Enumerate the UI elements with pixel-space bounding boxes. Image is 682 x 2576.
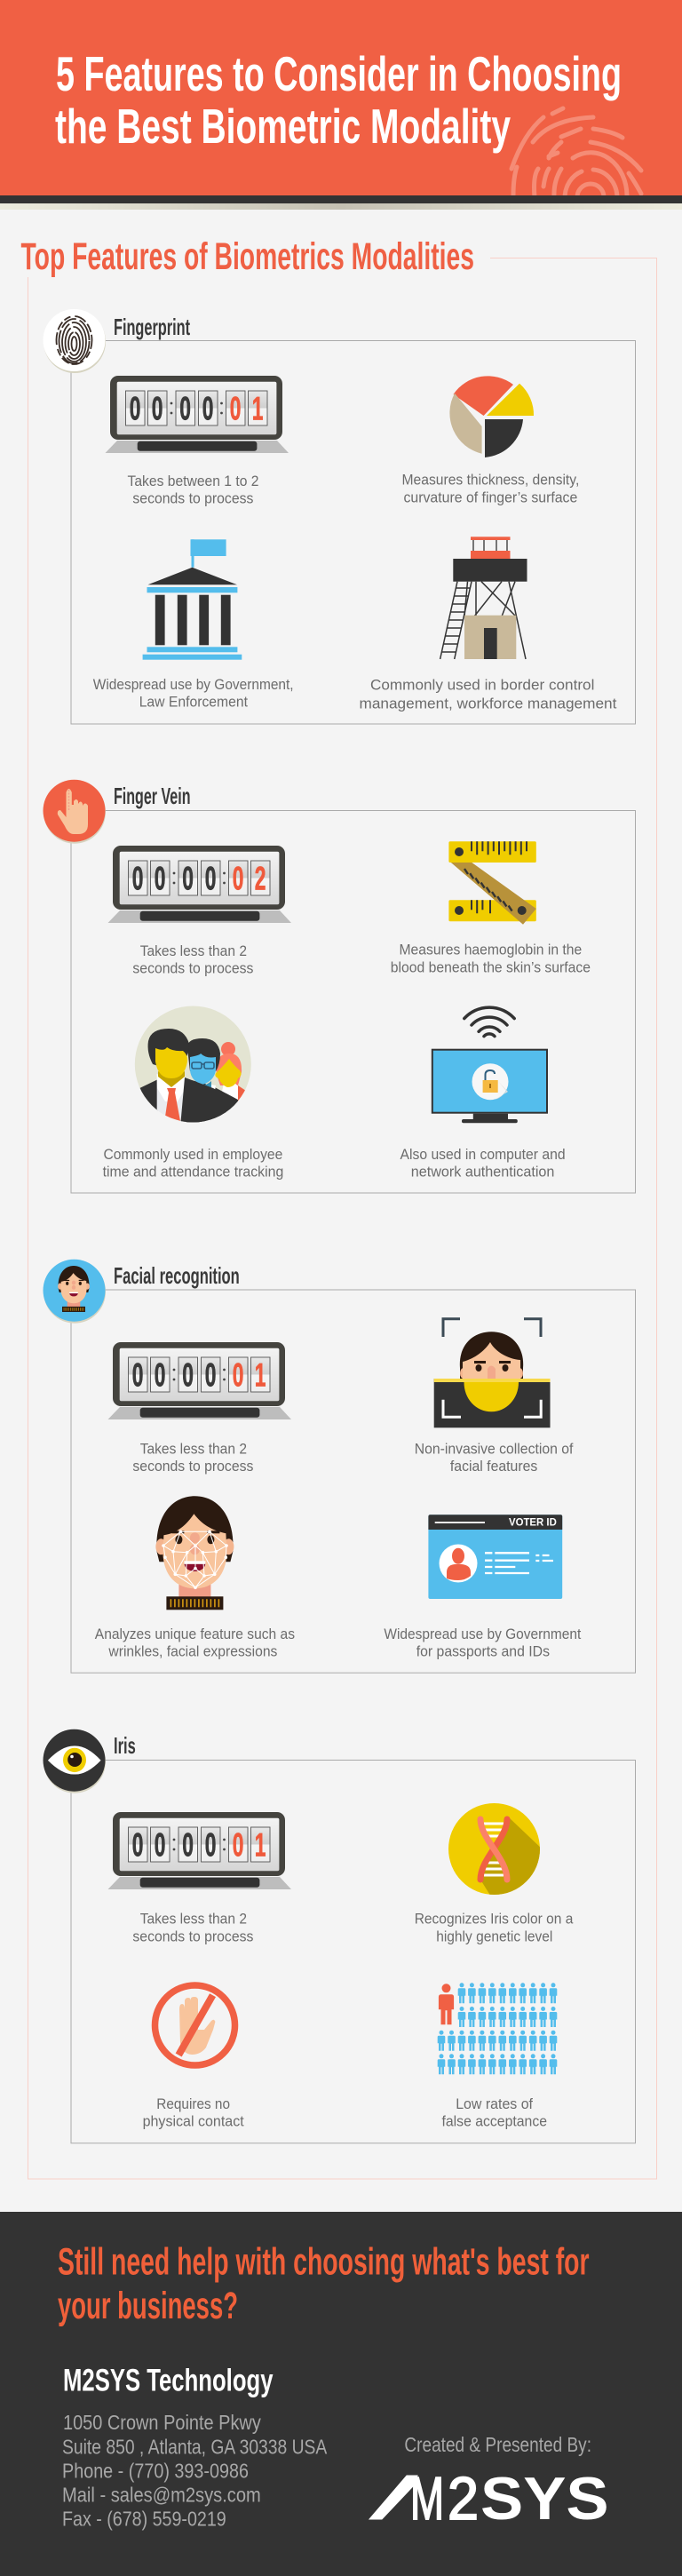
caption — [400, 1146, 566, 1181]
panel: finger vein — [43, 780, 636, 1193]
caption — [132, 1911, 253, 1944]
caption — [128, 473, 259, 507]
call to action: your business? — [58, 2285, 238, 2327]
caption — [95, 1626, 295, 1660]
caption: Low rates of — [456, 2095, 533, 2112]
icon: timer 00:00:01: 0 — [202, 391, 213, 427]
icon: no contact — [155, 1985, 234, 2065]
caption: Law Enforcement — [139, 694, 248, 711]
icon: fingerprint badge — [43, 309, 106, 373]
icon: timer 00:00:02: 2 — [255, 861, 266, 897]
icon: timer 00:00:01 — [105, 376, 289, 453]
fingerprint watermark — [512, 108, 641, 197]
caption: Analyzes unique feature such as — [95, 1626, 295, 1642]
address block: 1050 Crown Pointe Pkwy — [63, 2411, 261, 2434]
caption: network authentication — [411, 1164, 554, 1181]
caption: Takes less than 2 — [140, 1911, 247, 1928]
address block: Mail - sales@m2sys.com — [62, 2484, 261, 2507]
icon: timer 00:00:01: 0 — [155, 1357, 165, 1394]
panel: iris — [43, 1729, 636, 2143]
caption: Non-invasive collection of — [415, 1441, 574, 1458]
icon: timer 00:00:01: 0 — [179, 391, 191, 427]
panel frame — [71, 1761, 636, 2143]
icon: timer 00:00:01 — [108, 1342, 291, 1419]
title — [55, 46, 622, 154]
caption: Widespread use by Government, — [93, 676, 294, 693]
icon: timer 00:00:02: 0 — [155, 861, 165, 897]
icon: timer 00:00:01: 0 — [182, 1357, 194, 1394]
icon: timer 00:00:01: 0 — [155, 1827, 165, 1864]
icon: timer 00:00:02 — [108, 846, 291, 923]
heading: facial recognition: Facial recognition — [114, 1262, 240, 1289]
caption — [93, 676, 294, 711]
caption — [103, 1146, 283, 1181]
caption — [391, 942, 591, 975]
address block: Phone - (770) 393-0986 — [62, 2459, 249, 2482]
icon: pie chart — [449, 376, 534, 457]
footer panel — [0, 2212, 682, 2576]
caption — [359, 677, 617, 712]
caption: wrinkles, facial expressions — [107, 1643, 277, 1660]
caption — [415, 1911, 574, 1944]
woman — [221, 1042, 235, 1054]
outer frame — [28, 258, 657, 2179]
panel frame — [71, 341, 636, 724]
caption — [415, 1441, 574, 1475]
icon: timer 00:00:01: 1 — [255, 1827, 266, 1864]
icon: eye badge — [43, 1729, 106, 1793]
logo: SYS — [480, 2465, 609, 2532]
logo — [369, 2465, 609, 2532]
icon: timer 00:00:01: 0 — [132, 1357, 144, 1394]
icon: voter id card: VOTER ID — [509, 1515, 557, 1528]
logo: 2 — [448, 2465, 479, 2532]
caption: Takes less than 2 — [140, 942, 247, 959]
caption: Recognizes Iris color on a — [415, 1911, 574, 1928]
icon: face badge — [43, 1260, 106, 1324]
icon: face mesh — [155, 1496, 234, 1610]
icon: timer 00:00:01 — [108, 1812, 291, 1889]
icon: dna — [448, 1803, 543, 1901]
icon: timer 00:00:01: 0 — [182, 1827, 194, 1864]
icon: false acceptance people grid — [438, 1983, 557, 2074]
caption: false acceptance — [442, 2113, 547, 2130]
caption: management, workforce management — [359, 695, 617, 712]
icon: wifi computer — [432, 1007, 547, 1123]
icon: timer 00:00:01: 0 — [205, 1357, 217, 1394]
icon: watch tower — [440, 537, 527, 659]
main man — [140, 1080, 158, 1110]
caption — [132, 942, 253, 977]
caption: Measures thickness, density, — [401, 472, 579, 489]
caption — [143, 2095, 244, 2130]
caption: physical contact — [143, 2113, 244, 2130]
caption: Commonly used in border control — [370, 677, 594, 694]
caption: Requires no — [156, 2095, 230, 2112]
caption — [401, 472, 579, 506]
heading: fingerprint: Fingerprint — [114, 314, 190, 340]
caption: Measures haemoglobin in the — [400, 942, 582, 958]
caption: Takes between 1 to 2 — [128, 473, 259, 489]
company name: M2SYS Technology — [63, 2364, 274, 2398]
caption: time and attendance tracking — [103, 1164, 283, 1181]
icon: employees — [135, 1006, 251, 1123]
panel frame — [71, 1290, 636, 1673]
panel frame — [71, 810, 636, 1193]
icon: timer 00:00:02: 0 — [233, 861, 243, 897]
icon: government building — [143, 539, 242, 660]
icon: timer 00:00:01: 0 — [130, 391, 140, 427]
caption: seconds to process — [132, 1928, 253, 1944]
caption — [442, 2095, 547, 2130]
caption: Takes less than 2 — [140, 1441, 247, 1458]
caption: highly genetic level — [436, 1928, 552, 1944]
panel: facial recognition — [43, 1260, 636, 1673]
icon: voter id card — [428, 1515, 562, 1599]
caption — [132, 1441, 253, 1475]
caption: for passports and IDs — [416, 1643, 550, 1660]
caption — [384, 1626, 582, 1660]
icon: timer 00:00:02: 0 — [182, 861, 194, 897]
icon: timer 00:00:01: 0 — [233, 1827, 243, 1864]
caption: seconds to process — [132, 960, 253, 977]
address block: Fax - (678) 559-0219 — [62, 2507, 226, 2530]
presented by: Created & Presented By: — [404, 2433, 591, 2456]
caption: facial features — [450, 1458, 537, 1475]
caption: seconds to process — [132, 1458, 253, 1475]
logo: M — [410, 2465, 444, 2532]
caption: seconds to process — [132, 490, 253, 507]
title: the Best Biometric Modality — [55, 99, 511, 154]
caption: blood beneath the skin’s surface — [391, 958, 591, 975]
heading: finger vein: Finger Vein — [114, 783, 190, 809]
blue man — [179, 1080, 238, 1123]
panel: fingerprint — [43, 309, 636, 724]
icon: finger vein badge — [43, 780, 106, 844]
header banner — [0, 0, 682, 210]
icon: timer 00:00:01: 0 — [132, 1827, 144, 1864]
address block — [62, 2411, 328, 2530]
icon: timer 00:00:01: 0 — [233, 1357, 243, 1394]
icon: timer 00:00:01: 0 — [230, 391, 242, 427]
call to action — [58, 2241, 590, 2327]
icon: face scan — [434, 1319, 551, 1427]
icon: folding ruler — [448, 841, 536, 925]
icon: timer 00:00:02: 0 — [132, 861, 144, 897]
address block: Suite 850 , Atlanta, GA 30338 USA — [62, 2435, 328, 2458]
caption: Commonly used in employee — [103, 1146, 282, 1163]
icon: timer 00:00:01: 0 — [205, 1827, 217, 1864]
icon: timer 00:00:01: 0 — [152, 391, 163, 427]
caption: curvature of finger’s surface — [403, 489, 577, 506]
caption: Widespread use by Government — [384, 1626, 582, 1642]
heading: iris: Iris — [114, 1732, 136, 1759]
caption: Also used in computer and — [400, 1146, 566, 1163]
icon: timer 00:00:01: 1 — [255, 1357, 266, 1394]
icon: timer 00:00:01: 1 — [252, 391, 263, 427]
icon: timer 00:00:02: 0 — [205, 861, 217, 897]
